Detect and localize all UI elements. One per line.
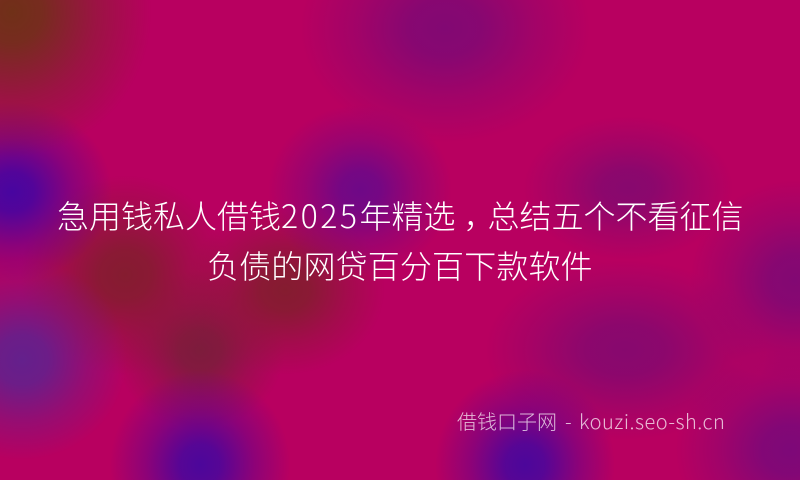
watermark: site name: kouzi.seo-sh.cn xyxy=(579,406,725,435)
watermark: site name xyxy=(457,406,725,435)
title: 负债的网贷百分百下款软件 xyxy=(207,242,593,288)
watermark: site name: 借钱口子网 xyxy=(457,406,557,435)
watermark: site name: - xyxy=(565,406,572,435)
title xyxy=(57,192,744,288)
title: 急用钱私人借钱2025年精选，总结五个不看征信 xyxy=(57,192,744,238)
